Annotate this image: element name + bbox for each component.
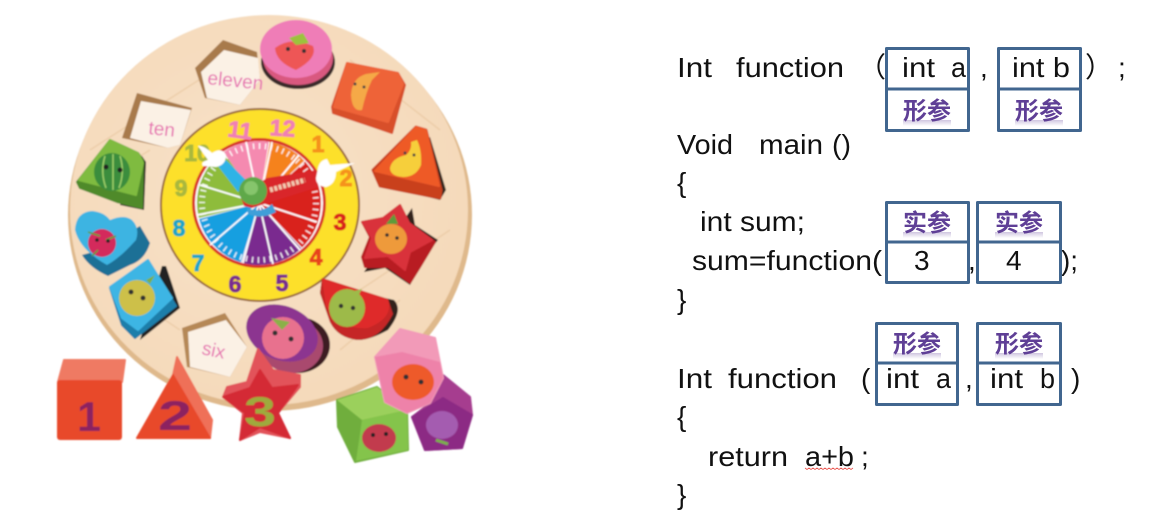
spell-check squiggle — [805, 468, 853, 470]
code: main function: int sum; — [700, 206, 805, 237]
code: main function: sum=function( — [692, 245, 883, 276]
block 1: 1 — [77, 393, 101, 440]
code: function definition: function — [728, 363, 837, 394]
toy clock illustration — [57, 15, 472, 462]
code: function prototype: ; — [1118, 52, 1126, 83]
code: main function: , — [968, 245, 976, 276]
code: main function: 3 — [914, 245, 930, 276]
numerals — [173, 114, 352, 297]
numerals: 4 — [310, 244, 323, 270]
code: main function: ); — [1061, 245, 1078, 276]
parameter boxes: prototype: 形参 — [903, 91, 951, 126]
code: function definition: a+b — [805, 441, 854, 472]
piece: pineapple star — [362, 205, 438, 285]
code: function prototype — [677, 52, 1126, 83]
code: function definition — [677, 363, 1080, 510]
argument boxes: call: 实参 — [995, 203, 1043, 238]
code: main function: { — [677, 167, 686, 198]
code: function prototype: ） — [1085, 52, 1113, 83]
numerals: 8 — [173, 215, 186, 241]
piece: dragon fruit heart — [75, 211, 150, 276]
hole: eleven — [195, 40, 264, 105]
argument boxes: call — [886, 202, 1061, 282]
block 1 — [57, 360, 125, 440]
code: function definition: ( — [861, 363, 871, 394]
numerals: 3 — [334, 209, 346, 235]
pile of pieces — [337, 329, 472, 462]
code: main function: 4 — [1006, 245, 1022, 276]
parameter boxes: prototype: 形参 — [1015, 91, 1063, 126]
numerals: 5 — [276, 270, 289, 296]
code: function prototype: （ — [858, 52, 886, 83]
hole: eleven: eleven — [206, 68, 264, 95]
block 3 star — [223, 349, 300, 440]
code: function definition: int — [990, 363, 1023, 394]
piece: lemon cube — [110, 260, 180, 340]
code: function definition: a — [936, 363, 951, 394]
code: function definition: Int — [677, 363, 712, 394]
parameter boxes: definition: 形参 — [893, 324, 941, 359]
block 2: 2 — [158, 392, 192, 439]
clock hands — [198, 146, 355, 217]
parameter boxes: definition: 形参 — [995, 324, 1043, 359]
green cube apple — [337, 387, 408, 462]
argument boxes: call: 实参 — [903, 203, 951, 238]
hole: six: six — [200, 338, 228, 364]
parameter boxes: prototype — [886, 48, 1081, 130]
wooden board — [68, 15, 472, 411]
code: function definition: return — [708, 441, 788, 472]
orange hexagon — [375, 329, 443, 413]
code: function prototype: int — [902, 52, 935, 83]
code: function definition: ) — [1071, 363, 1080, 394]
hole: ten — [122, 93, 192, 148]
piece: watermelon — [77, 140, 146, 210]
numerals: 10 — [184, 140, 210, 166]
wedge dividers — [197, 142, 317, 264]
code: function definition: b — [1040, 363, 1055, 394]
numerals: 1 — [312, 131, 325, 157]
code: main function: Void — [677, 129, 733, 160]
hole: ten: ten — [147, 118, 176, 142]
piece: pear triangle — [373, 127, 446, 200]
code: function prototype: , — [980, 52, 988, 83]
piece: apple drop — [320, 278, 398, 340]
parameter boxes: definition — [876, 324, 1061, 404]
numerals: 9 — [175, 175, 187, 201]
piece: banana square — [332, 63, 405, 133]
piece: strawberry — [260, 20, 335, 89]
clock colour wedges — [202, 146, 316, 260]
code: function prototype: Int — [677, 52, 712, 83]
code: function prototype: a — [951, 52, 966, 83]
numerals: 6 — [229, 271, 241, 297]
code: main function: } — [677, 284, 686, 315]
code: function definition: , — [965, 363, 973, 394]
code: main function — [677, 129, 1078, 315]
numerals: 11 — [226, 116, 254, 145]
code: function prototype: int b — [1012, 52, 1070, 83]
clock face — [160, 108, 360, 302]
piece: plum oval — [238, 294, 330, 373]
block 3 star: 3 — [244, 388, 276, 435]
code: function definition: } — [677, 479, 686, 510]
block 2 — [137, 357, 212, 439]
code: main function: main — [759, 129, 823, 160]
code: main function: () — [832, 129, 851, 160]
numerals: 2 — [340, 165, 352, 191]
code: function definition: int — [886, 363, 919, 394]
code: function prototype: function — [736, 52, 844, 83]
grape pentagon — [412, 375, 472, 450]
hole: six — [182, 313, 247, 377]
code: function definition: { — [677, 401, 686, 432]
code: function definition: ; — [861, 441, 869, 472]
numerals: 7 — [192, 250, 204, 276]
numerals: 12 — [269, 114, 296, 142]
